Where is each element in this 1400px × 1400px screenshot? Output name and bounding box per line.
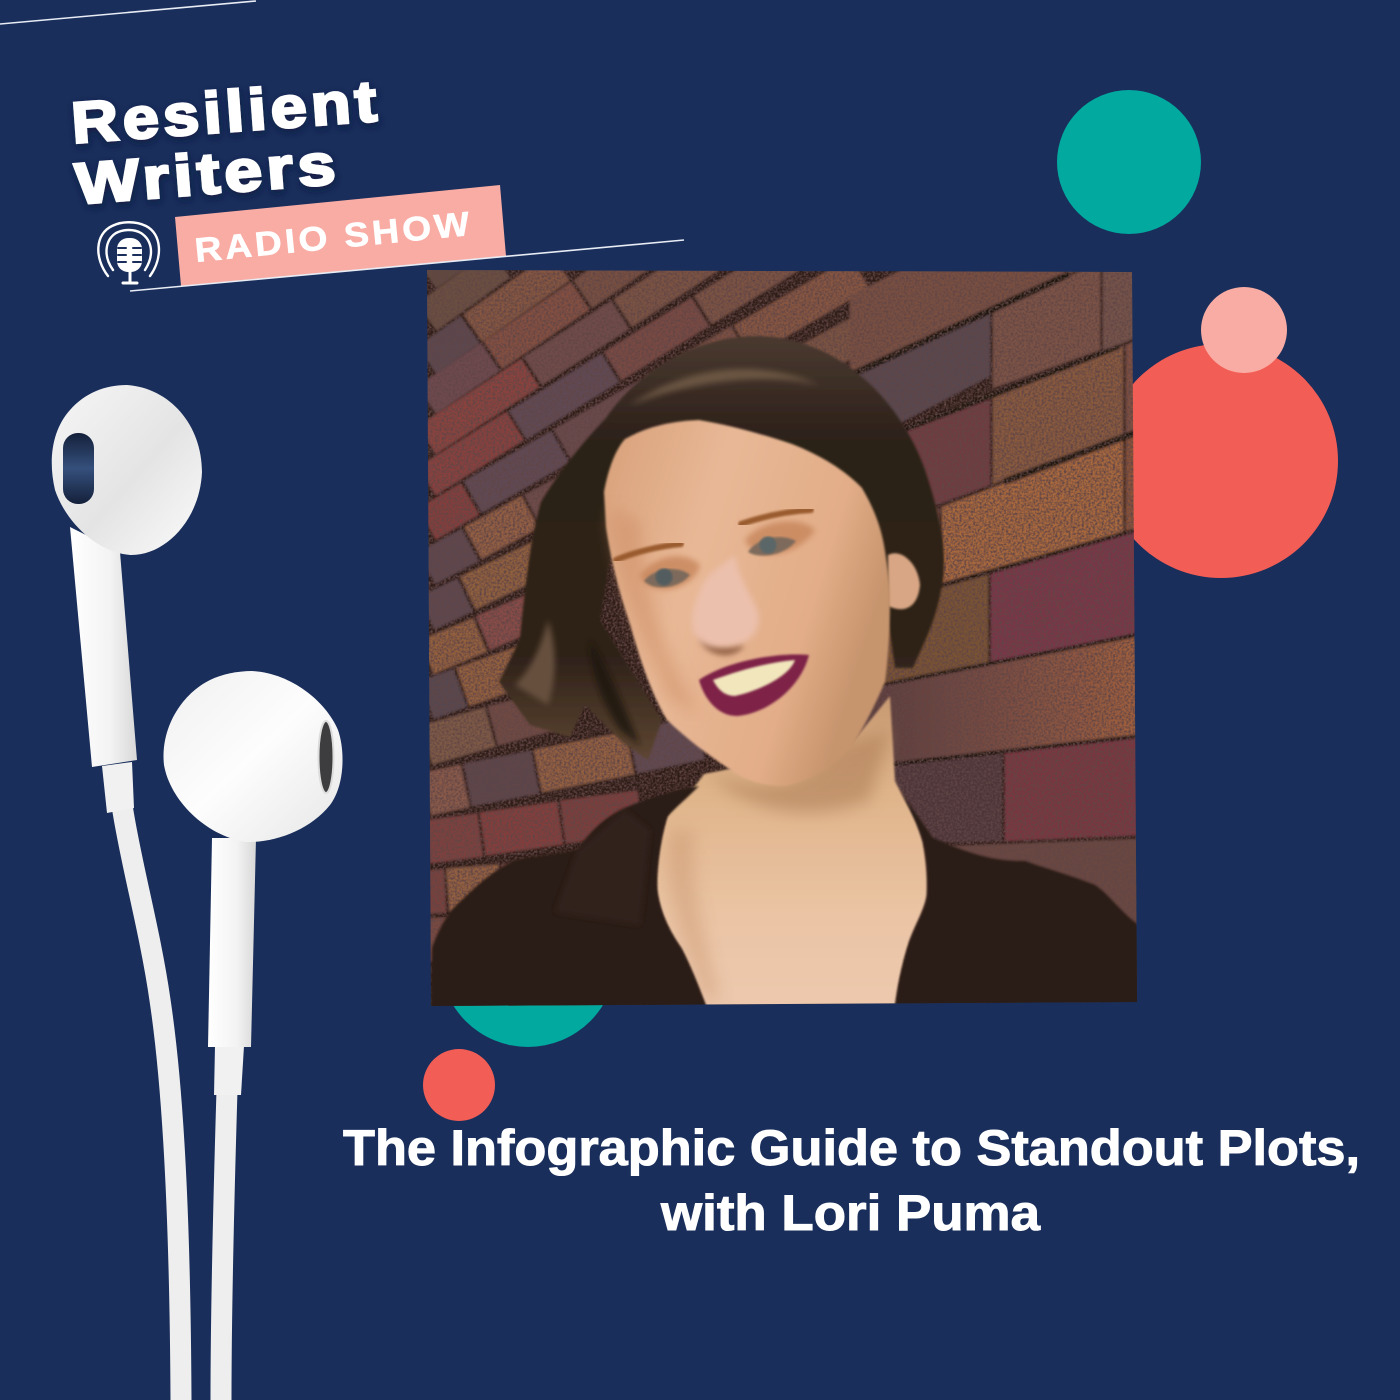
neck and chest: [657, 696, 927, 1008]
connector: right: [214, 1046, 244, 1095]
chest shading: [667, 830, 720, 1000]
speaker mesh: right: [318, 721, 334, 793]
icon: microphone: [98, 222, 159, 283]
eyes, brows, nose and mouth: [616, 510, 815, 716]
circle: teal top right: [1057, 90, 1201, 234]
circle: pink small: [1201, 287, 1287, 373]
speaker mesh: left: [63, 433, 94, 504]
logo: Resilient Writers: Writers: [73, 131, 342, 217]
top corner line: [0, 1, 256, 24]
title: with Lori Puma: [660, 1185, 1041, 1241]
title: The Infographic Guide to Standout Plots,: [343, 1120, 1360, 1176]
ear: [888, 553, 920, 609]
stem: right: [208, 838, 256, 1047]
cable: left: [122, 805, 181, 1400]
connector: left: [102, 762, 134, 813]
face shading: [610, 510, 700, 715]
shirt collar: [562, 816, 647, 922]
brick texture: [420, 265, 1145, 1010]
face: [604, 420, 890, 786]
earbud: left: [52, 385, 202, 1400]
bud: right: [163, 671, 343, 842]
hair: [499, 336, 944, 760]
neck shadow: [710, 730, 890, 812]
radio show banner: RADIO SHOW: [193, 205, 474, 270]
stem: left: [70, 527, 137, 767]
circle: teal behind photo: [440, 871, 616, 1047]
logo: Resilient Writers: Resilient: [69, 68, 383, 156]
radio show banner: [175, 185, 506, 286]
photo: woman against brick wall: [427, 270, 1137, 1006]
right wall bricks: [848, 271, 1075, 371]
brick wall: [427, 270, 1137, 1006]
logo: Resilient Writers: [69, 68, 383, 217]
cable: right: [221, 1090, 227, 1400]
circle: coral large: [1104, 344, 1338, 578]
shirt: [431, 781, 1140, 1008]
earbud: right: [163, 671, 343, 1400]
underline beneath banner: [130, 240, 684, 291]
circle: coral small: [423, 1049, 495, 1121]
title: [343, 1120, 1360, 1241]
bud: left: [52, 385, 202, 555]
